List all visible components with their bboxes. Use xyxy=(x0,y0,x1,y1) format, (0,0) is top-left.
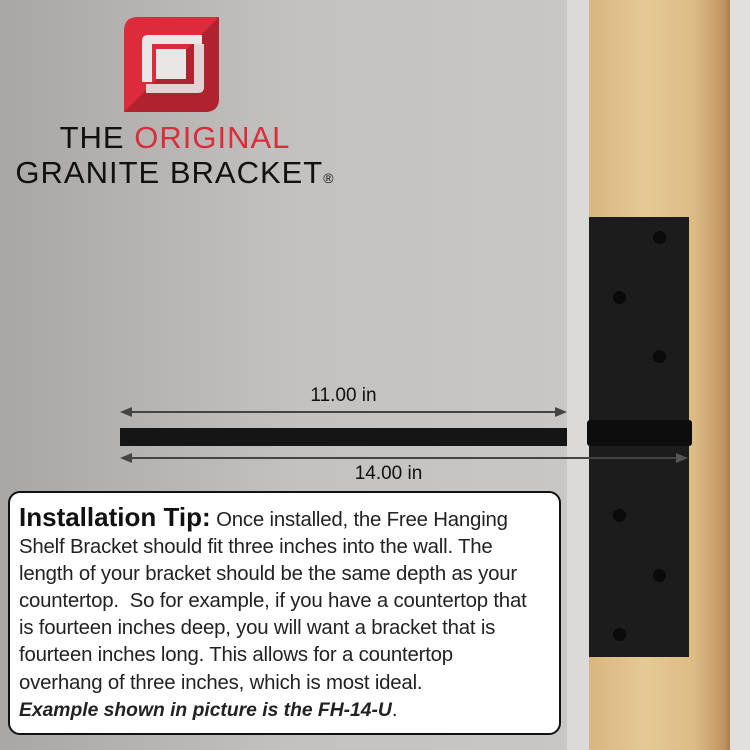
wood stud xyxy=(589,0,730,750)
callout: installation tip: overhang of three inches, which is most ideal. xyxy=(19,672,422,694)
callout: installation tip: countertop. So for example, if you have a countertop that xyxy=(19,590,527,612)
wall trim strip xyxy=(567,0,589,750)
logo text xyxy=(15,120,335,190)
arrow: 11.00 in: 11.00 in xyxy=(310,385,377,406)
callout: installation tip: is fourteen inches deep, you will want a bracket that is xyxy=(19,617,495,639)
callout: installation tip xyxy=(8,491,561,735)
arrow: 11.00 in xyxy=(120,385,567,417)
arrow: 14.00 in: 14.00 in xyxy=(355,463,422,484)
right wall strip xyxy=(730,0,750,750)
callout: installation tip: length of your bracket should be the same depth as your xyxy=(19,563,517,585)
screws xyxy=(653,231,666,244)
bracket arm xyxy=(120,428,567,446)
icon: logo mark xyxy=(124,17,219,112)
callout: installation tip: fourteen inches long. This allows for a countertop xyxy=(19,644,453,666)
callout: installation tip: Installation Tip: Once installed, the Free Hanging xyxy=(19,502,508,532)
arrow: 14.00 in xyxy=(120,453,688,484)
logo text: GRANITE BRACKET® xyxy=(15,155,335,190)
callout: installation tip: Shelf Bracket should fit three inches into the wall. The xyxy=(19,536,493,558)
bracket plate xyxy=(589,217,689,657)
logo text: THE ORIGINAL xyxy=(60,120,290,155)
logo xyxy=(15,17,335,190)
callout: installation tip: Example shown in picture is the FH-14-U. xyxy=(19,699,397,721)
